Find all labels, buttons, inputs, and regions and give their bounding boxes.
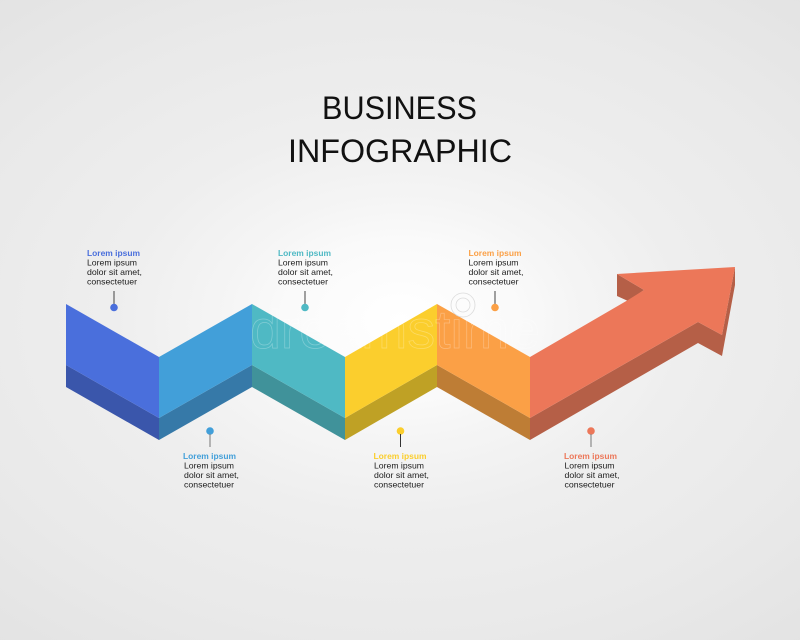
callout 4: yellow: consectetuer [374, 480, 424, 490]
callout 2: light blue: Lorem ipsum [184, 460, 234, 470]
callout 5: orange: consectetuer [468, 276, 519, 286]
callout 3: teal: consectetuer [278, 276, 328, 286]
callout 5: orange: dolor sit amet, [468, 267, 524, 277]
callout 2: light blue: dolor sit amet, [184, 470, 239, 480]
callout 1: blue: consectetuer [87, 276, 137, 286]
segment 3: teal [252, 304, 345, 440]
segment 5: orange [437, 304, 530, 440]
callout 2: light blue: consectetuer [184, 480, 234, 490]
callout 3: teal: Lorem ipsum [278, 258, 328, 268]
watermark: dreamstime [250, 300, 540, 360]
callout 4: yellow: dolor sit amet, [374, 470, 429, 480]
zigzag arrow chart [66, 267, 735, 440]
segment 2: light blue [159, 304, 252, 440]
segment 4: yellow [345, 304, 437, 440]
callout 6: coral: dolor sit amet, [564, 470, 620, 480]
callout 3: teal [278, 248, 333, 311]
callout 6: coral: consectetuer [564, 480, 615, 490]
callout 2: light blue [183, 427, 239, 490]
callout 5: orange: Lorem ipsum [468, 248, 522, 258]
callout 1: blue: dolor sit amet, [87, 267, 142, 277]
callout 6: coral: Lorem ipsum [564, 451, 617, 461]
callout 6: coral [564, 427, 620, 490]
callout 1: blue: Lorem ipsum [87, 248, 140, 258]
segment 1: blue [66, 304, 159, 440]
callout 4: yellow: Lorem ipsum [374, 451, 426, 461]
callout 4: yellow: Lorem ipsum [374, 460, 424, 470]
callout 5: orange [468, 248, 524, 311]
callout 1: blue: Lorem ipsum [87, 258, 137, 268]
segment 6: coral arrow [530, 267, 735, 440]
callout 3: teal: Lorem ipsum [278, 248, 331, 258]
title: BUSINESS [322, 90, 477, 126]
callout 4: yellow [374, 427, 429, 490]
callout 3: teal: dolor sit amet, [278, 267, 333, 277]
callout 2: light blue: Lorem ipsum [183, 451, 236, 461]
title: INFOGRAPHIC [288, 133, 512, 169]
callout 1: blue [87, 248, 142, 311]
title [288, 90, 512, 169]
callout 6: coral: Lorem ipsum [564, 460, 615, 470]
callout 5: orange: Lorem ipsum [468, 258, 519, 268]
